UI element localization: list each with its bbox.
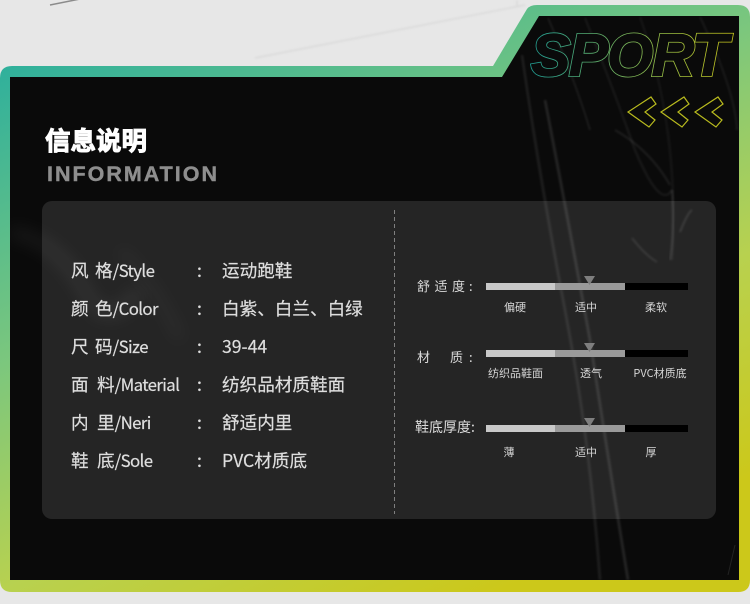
icon: triple chevrons [628,97,723,127]
row: style [71,258,292,283]
scale: comfort: 适中 [575,299,597,315]
row: style: : [197,258,202,283]
row: material: 料/Material [97,372,180,397]
row: size: 尺 [71,334,89,359]
row: color: 色/Color [95,296,159,321]
scale: sole thickness: 适中 [575,444,597,460]
scale: sole thickness [415,417,688,460]
scale: sole thickness: 鞋底厚度: [415,417,475,437]
row: lining [71,410,292,435]
scale: sole thickness: 厚 [646,444,656,460]
row: size: : [197,334,202,359]
row: material: 面 [71,372,89,397]
row: style: 运动跑鞋 [222,258,292,283]
scale: material: 透气 [580,365,602,381]
scale: material: PVC材质底 [633,365,687,381]
row: lining: 舒适内里 [222,410,292,435]
row: size: 码/Size [95,334,148,359]
row: material: : [197,372,202,397]
specification table [71,258,363,473]
row: color: 白紫、白兰、白绿 [222,296,363,321]
panel: specifications [42,201,716,519]
row: color [71,296,363,321]
row: sole: PVC材质底 [222,448,307,473]
row: sole: 底/Sole [97,448,153,473]
plastic streaks [521,18,738,580]
row: material: 纺织品材质鞋面 [222,372,345,397]
row: lining: 里/Neri [97,410,151,435]
scale: material [417,343,688,381]
scale: material: 材质: [417,347,473,366]
scale: comfort: 柔软 [645,299,667,315]
sport outline title: SPORT [531,22,733,88]
row: size: 39-44 [222,334,267,359]
row: lining: : [197,410,202,435]
row: sole [71,448,307,473]
dashed divider [394,210,396,514]
scale: comfort [417,276,688,315]
row: color: : [197,296,202,321]
row: material [71,372,345,397]
row: style: 风 [71,258,89,283]
row: size [71,334,267,359]
scale: comfort: 舒适度: [417,276,473,295]
row: sole: : [197,448,202,473]
row: sole: 鞋 [71,448,89,473]
sport outline title: SPORT [531,22,733,88]
scale: comfort: 偏硬 [504,299,526,315]
scale: material: 纺织品鞋面 [488,365,543,381]
heading: 信息说明: 信息说明 [45,121,147,158]
row: lining: 内 [71,410,89,435]
row: color: 颜 [71,296,89,321]
row: style: 格/Style [95,258,155,283]
scale: sole thickness: 薄 [504,444,514,460]
heading: INFORMATION: INFORMATION [47,162,217,186]
